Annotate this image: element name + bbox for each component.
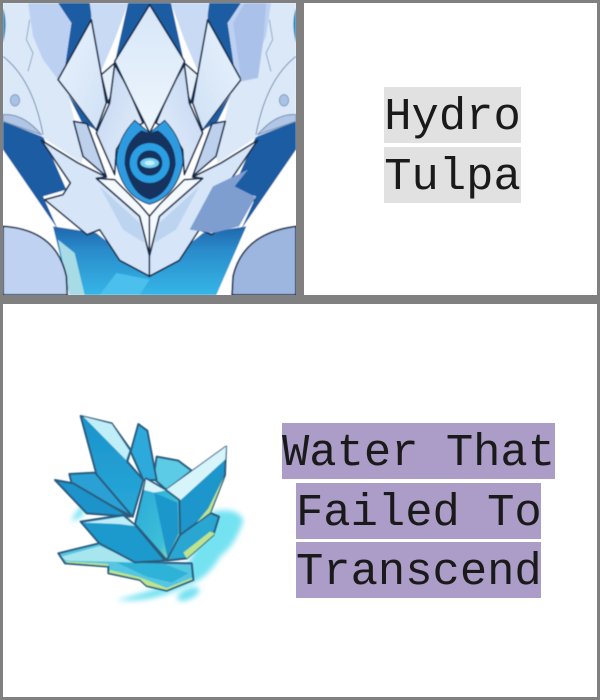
back shards	[153, 457, 192, 490]
heading: Hydro Tulpa: Hydro	[384, 91, 521, 143]
panel: Hydro Tulpa portrait	[3, 3, 296, 295]
eye	[116, 120, 183, 204]
right side shading	[190, 170, 256, 233]
base slab	[58, 543, 193, 591]
central crest	[115, 5, 185, 133]
bottom teal water	[53, 226, 246, 295]
heading: Water That Failed To Transcend: Transcend	[296, 546, 542, 598]
heading: Water That Failed To Transcend	[166, 423, 555, 598]
heading: Hydro Tulpa: Tulpa	[384, 151, 521, 203]
heading: Water That Failed To Transcend: Failed To	[296, 487, 542, 539]
icon: water crystal	[53, 414, 246, 604]
heading: Hydro Tulpa	[384, 87, 521, 203]
heading: Water That Failed To Transcend: Water That	[282, 427, 555, 479]
right shard	[166, 447, 226, 535]
bottom round wings	[3, 226, 67, 295]
lower right shard	[167, 513, 219, 561]
center shard	[135, 478, 180, 560]
